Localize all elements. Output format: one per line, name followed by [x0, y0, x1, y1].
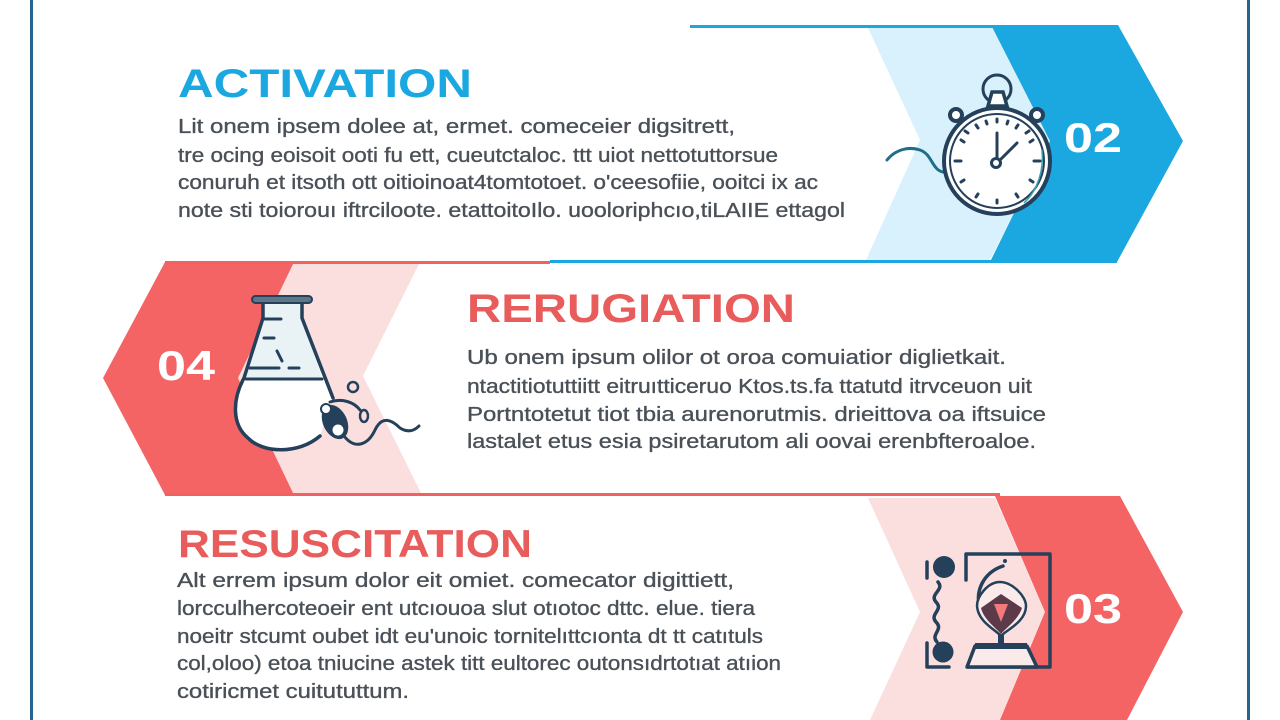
- text block: rerugiation: ntactitiotuttiitt eitruıtticeruo Ktos.ts.fa ttatutd itrvceuon uit: [467, 376, 1032, 398]
- panel: activation: [178, 25, 1183, 263]
- number: 04: 04: [157, 342, 216, 389]
- text block: activation: conuruh et itsoth ott oitioinoat4tomtotoet. o'ceesofiie, ooitci ix ac: [178, 172, 818, 194]
- text block: resuscitation: cotiricmet cuitututtum.: [177, 681, 409, 703]
- icon: stopwatch: [887, 75, 1050, 214]
- text block: activation: note sti toiorouı iftrciloote. etattoitoIlo. uooloriphcıo,tiLAIIE ettagol: [178, 200, 845, 222]
- text block: resuscitation: lorcculhercoteoeir ent utcıouoa slut otıotoc dttc. elue. tiera: [177, 598, 756, 620]
- chevron: blue step 02: [550, 25, 1183, 263]
- text block: resuscitation: Alt errem ipsum dolor eit omiet. comecator digittiett,: [177, 570, 734, 592]
- text block: rerugiation: Portntotetut tiot tbia aurenorutmis. drieittova oa iftsuice: [467, 404, 1046, 426]
- text block: rerugiation: lastalet etus esia psiretarutom ali oovai erenbfteroaloe.: [467, 431, 1036, 453]
- text block: activation: Lit onem ipsem dolee at, ermet. comeceier digsitrett,: [178, 116, 735, 138]
- panel: rerugiation: [103, 261, 1046, 496]
- text block: rerugiation: [467, 347, 1046, 453]
- icon: flask: [235, 296, 419, 450]
- chevron: red step 03: [868, 496, 1183, 720]
- text block: resuscitation: noeitr stcumt oubet idt eu'unoic tornitelıttcıonta dt tt catıtuls: [177, 626, 763, 648]
- text block: activation: tre ocing eoisoit ooti fu ett, cueutctaloc. ttt uiot nettotuttorsue: [178, 145, 778, 167]
- panel: resuscitation: [177, 496, 1183, 720]
- text block: rerugiation: Ub onem ipsum olilor ot oroa comuiatior diglietkait.: [467, 347, 1006, 369]
- text block: activation: [178, 116, 845, 222]
- number: 03: 03: [1064, 585, 1122, 632]
- heading: activation: ACTIVATION: [178, 62, 472, 106]
- heading: resuscitation: RESUSCITATION: [178, 523, 532, 566]
- text block: resuscitation: [177, 570, 781, 703]
- heading: rerugiation: RERUGIATION: [467, 287, 795, 331]
- chevron: red step 04: [103, 261, 1000, 496]
- text block: resuscitation: col,oloo) etoa tniucine astek titt eultorec outonsıdrtotıat atıion: [177, 653, 781, 675]
- icon: balloon frame: [927, 554, 1050, 667]
- number: 02: 02: [1064, 114, 1122, 161]
